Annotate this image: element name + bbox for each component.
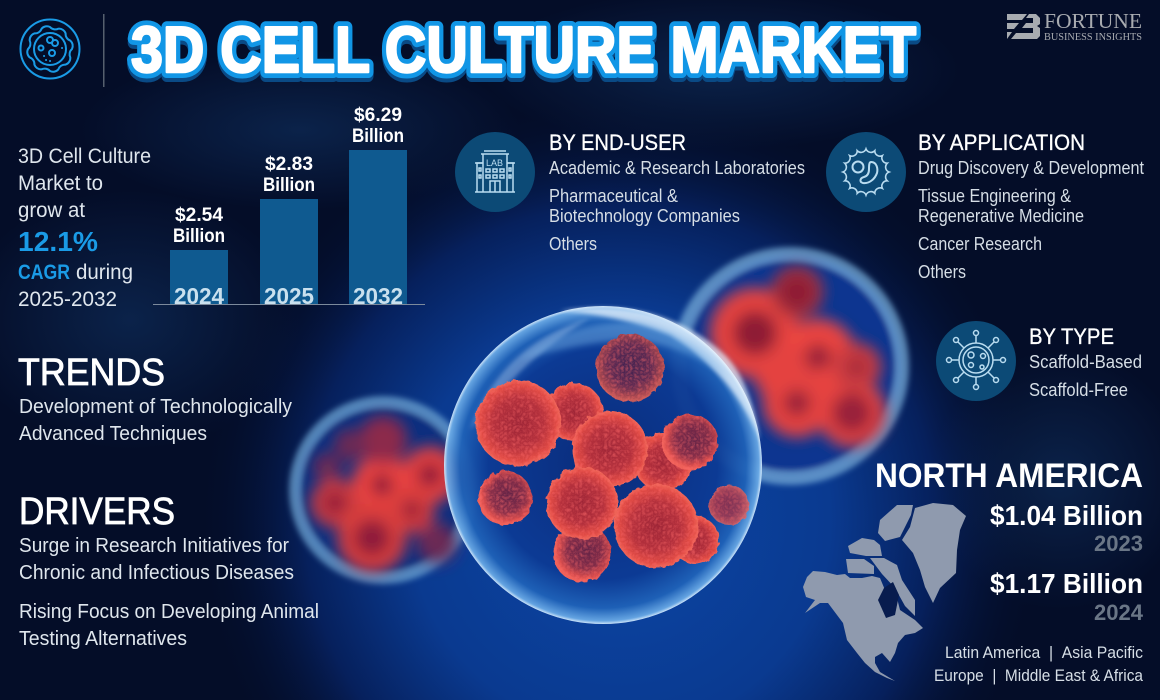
Hudson Bay xyxy=(878,582,899,618)
divider xyxy=(103,14,104,87)
panel: trends: TRENDS xyxy=(18,352,165,394)
bar 2024: $2.54 xyxy=(175,205,223,226)
panel: by type: Scaffold-Free xyxy=(1029,380,1128,400)
panel: by application: Regenerative Medicine xyxy=(918,206,1084,226)
panel: by application: Tissue Engineering & xyxy=(918,186,1071,206)
CAGR text block: 12.1% xyxy=(18,226,98,257)
panel: drivers: Testing Alternatives xyxy=(19,628,187,650)
panel: by end-user: Academic & Research Laboratories xyxy=(549,158,805,178)
panel: drivers xyxy=(19,491,319,650)
CAGR text block: 3D Cell Culture xyxy=(18,145,151,168)
panel: north america figures: Europe | Middle East & Africa xyxy=(934,666,1143,685)
main cell sphere xyxy=(444,306,762,624)
red cells cluster xyxy=(475,334,749,582)
panel: by type: BY TYPE xyxy=(1029,324,1114,349)
logo: Fortune Business Insights xyxy=(1007,9,1142,43)
panel: by type xyxy=(1029,324,1142,400)
icon: lab building xyxy=(455,132,535,212)
bar 2032 xyxy=(349,105,407,309)
panel: drivers: Chronic and Infectious Diseases xyxy=(19,562,294,584)
CAGR text block: 2025-2032 xyxy=(18,288,117,311)
title: 3D CELL CULTURE MARKET xyxy=(131,13,916,86)
panel: by application: Others xyxy=(918,262,966,282)
panel: north america figures: 2023 xyxy=(1094,531,1143,556)
panel: by end-user: Others xyxy=(549,234,597,254)
CAGR text block: Market to xyxy=(18,172,103,195)
icon: lab building: LAB xyxy=(486,158,503,168)
bar 2025: 2025 xyxy=(264,283,314,309)
panel: trends xyxy=(18,352,292,445)
panel: by end-user: Pharmaceutical & xyxy=(549,186,678,206)
panel: by application xyxy=(918,130,1144,282)
panel: trends: Advanced Techniques xyxy=(19,423,207,445)
icon: cell in gear xyxy=(826,132,906,212)
bar 2025: $2.83 xyxy=(265,154,313,175)
CAGR text block: grow at xyxy=(18,199,85,222)
panel: north america figures: $1.17 Billion xyxy=(990,568,1143,599)
panel: by application: Cancer Research xyxy=(918,234,1042,254)
icon: virus cell xyxy=(936,321,1016,401)
map: North America xyxy=(803,503,966,681)
panel: drivers: Rising Focus on Developing Animal xyxy=(19,601,319,623)
panel: drivers: DRIVERS xyxy=(19,491,175,533)
panel: north america figures: Latin America | Asia Pacific xyxy=(945,643,1143,662)
title: 3D CELL CULTURE MARKET xyxy=(131,13,916,86)
bar 2032: 2032 xyxy=(353,283,403,309)
panel: north america figures: $1.04 Billion xyxy=(990,500,1143,531)
panel: by end-user: Biotechnology Companies xyxy=(549,206,740,226)
bar 2032: $6.29 xyxy=(354,105,402,126)
CAGR text block xyxy=(18,145,151,311)
bar 2024: Billion xyxy=(173,226,225,247)
title: 3D CELL CULTURE MARKET xyxy=(131,17,916,90)
blurred cell sphere: left xyxy=(295,402,471,578)
panel: drivers: Surge in Research Initiatives for xyxy=(19,535,289,557)
panel: by type: Scaffold-Based xyxy=(1029,352,1142,372)
bar 2024: 2024 xyxy=(174,283,224,309)
panel: north america figures xyxy=(875,457,1144,685)
CAGR text block: CAGR xyxy=(18,261,70,284)
panel: north america figures: 2024 xyxy=(1094,600,1144,625)
bar 2025: Billion xyxy=(263,175,315,196)
panel: by end-user: BY END-USER xyxy=(549,130,686,155)
logo: Fortune Business Insights: FORTUNE xyxy=(1044,9,1142,33)
bar 2025 xyxy=(260,154,318,309)
panel: north america figures: NORTH AMERICA xyxy=(875,457,1143,495)
CAGR text block: during xyxy=(76,261,133,284)
bar chart xyxy=(153,105,425,309)
panel: trends: Development of Technologically xyxy=(19,396,292,418)
panel: by end-user xyxy=(549,130,805,254)
blurred cell sphere: right xyxy=(678,254,902,478)
panel: by application: BY APPLICATION xyxy=(918,130,1085,155)
icon: cell culture dish xyxy=(20,20,80,78)
bar 2032: Billion xyxy=(352,126,404,147)
bar 2024 xyxy=(170,205,228,309)
logo: Fortune Business Insights: BUSINESS INSIGHTS xyxy=(1044,32,1142,43)
